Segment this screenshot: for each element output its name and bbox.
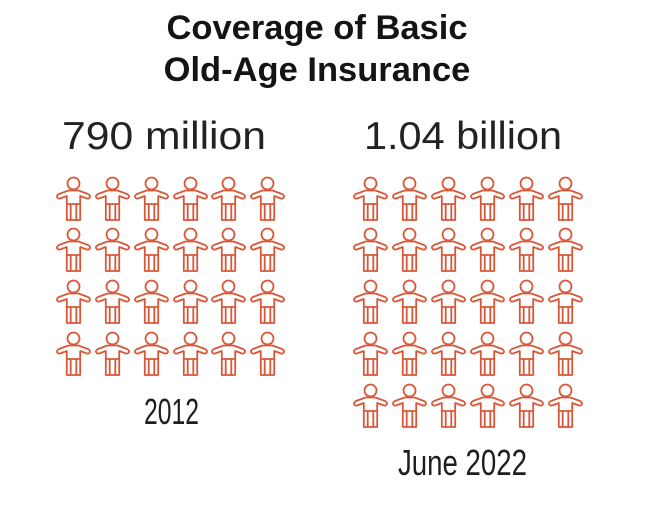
title xyxy=(164,9,470,89)
figure: 1.04 billion: 1.04 billion xyxy=(364,115,562,158)
pictogram: 2012 coverage xyxy=(57,178,284,375)
title: Old-Age Insurance xyxy=(164,51,470,89)
figure: 790 million: 790 million xyxy=(62,115,266,158)
year label: 2012: 2012 xyxy=(144,391,199,432)
year label: June 2022: June 2022 xyxy=(398,442,527,483)
pictogram: June 2022 coverage xyxy=(354,178,582,427)
title: Coverage of Basic xyxy=(166,9,468,47)
